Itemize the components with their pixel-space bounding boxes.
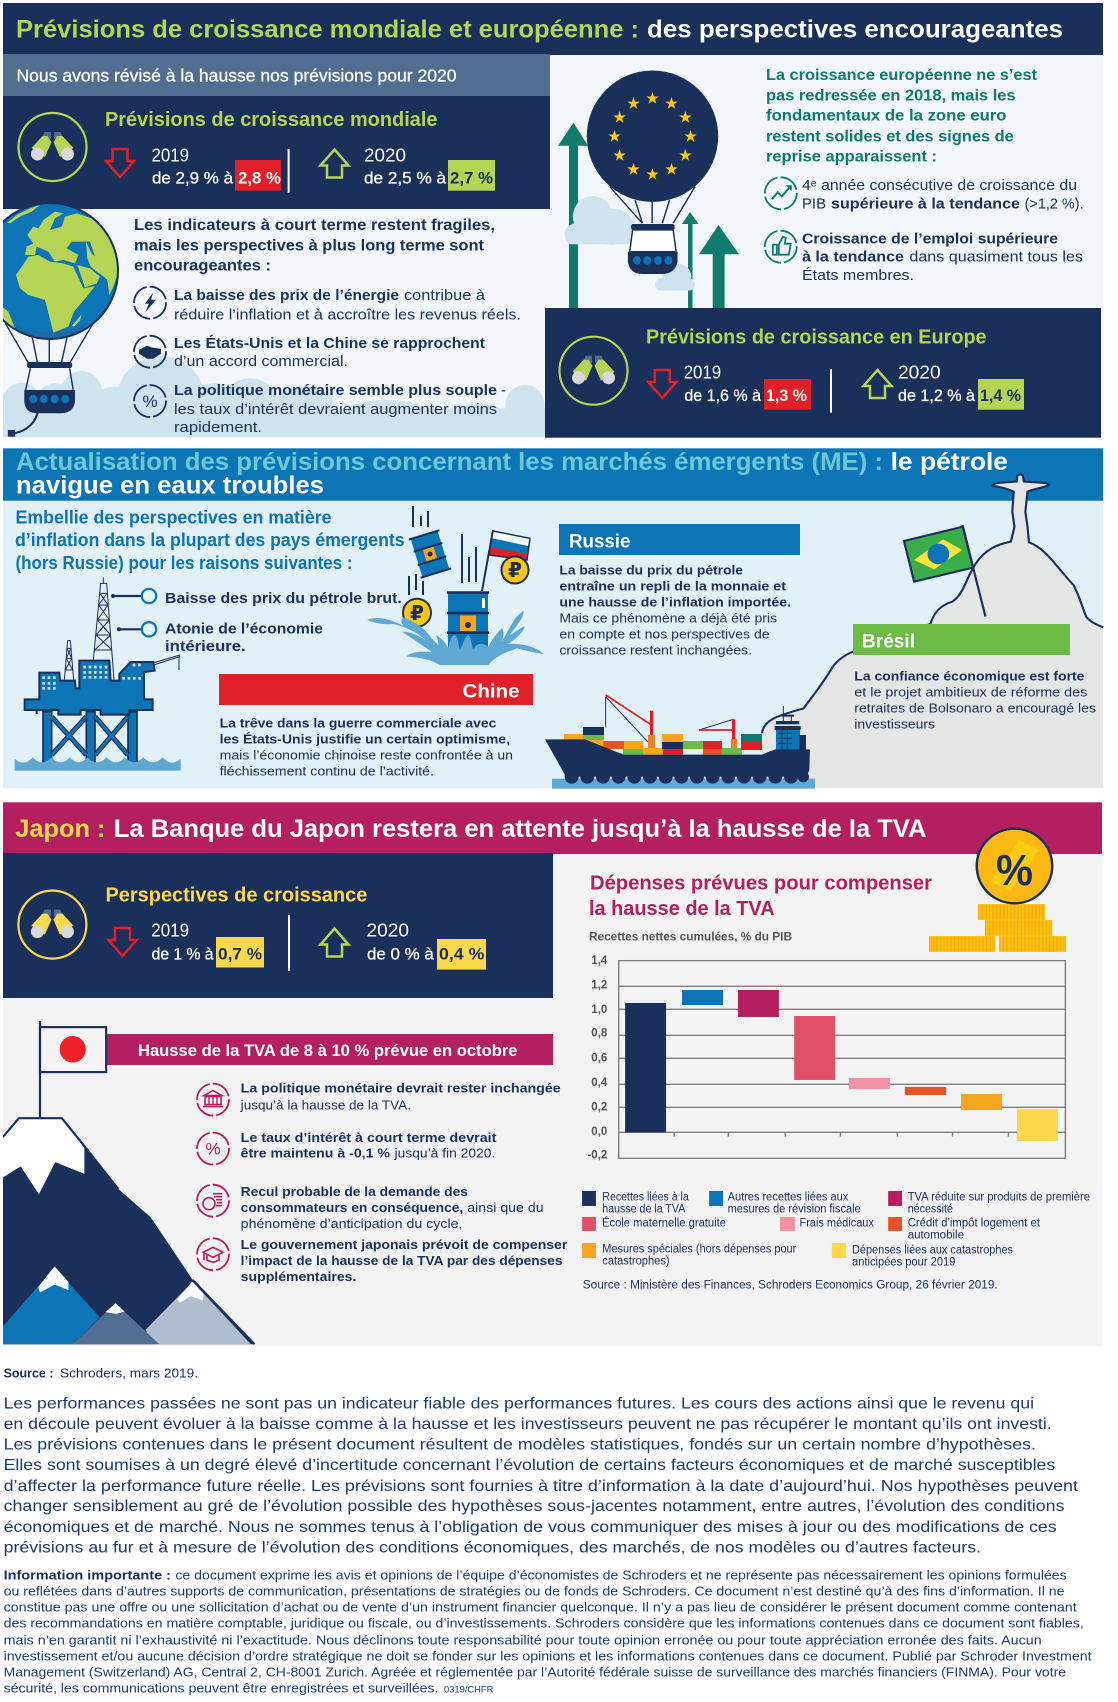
text: China: mais l’économie chinoise reste confrontée à un <box>220 748 513 763</box>
text: GDP growth: (>1,2 %). <box>1025 196 1084 212</box>
icon: gold coin with percent: % <box>996 846 1033 895</box>
falling lines <box>409 506 476 595</box>
text: Russia: une hausse de l’inflation importée. <box>559 594 791 609</box>
text: GDP growth: 4ᵉ année consécutive de croissance du <box>802 178 1077 194</box>
text: important information <box>4 1568 1092 1695</box>
heading: european growth: fondamentaux de la zone euro <box>766 108 1007 125</box>
text: important information: ou reflétées dans d’autres supports de communication, présentations de stratégies ou de fonds de Schroders. Ce document n’est destiné qu’à des fins d’information. Il ne <box>4 1584 1065 1598</box>
icon: percent <box>197 1133 229 1165</box>
icon: energy bolt <box>134 287 166 319</box>
legend: Dépenses liées aux catastrophes <box>852 1245 1013 1257</box>
text: consumer demand: consommateurs en conséquence, <box>241 1200 463 1215</box>
text: Brazil: La confiance économique est forte <box>854 668 1084 683</box>
text: short term indicators <box>134 217 495 275</box>
icon: down arrow <box>106 149 134 177</box>
icon: down arrow <box>648 370 676 398</box>
text: Brazil <box>854 668 1097 731</box>
text: energy prices: La baisse des prix de l’énergie <box>174 288 399 304</box>
banner: VAT increase: Hausse de la TVA de 8 à 10 % prévue en octobre <box>138 1042 518 1060</box>
chart subtitle: Recettes nettes cumulées, % du PIB <box>589 932 792 944</box>
legend: anticipées pour 2019 <box>852 1257 955 1269</box>
source line: Schroders, mars 2019. <box>60 1366 198 1380</box>
icon: coins <box>197 1185 229 1217</box>
text: Russia: Mais ce phénomène a déjà été pris <box>559 610 778 625</box>
icon: percent: % <box>205 1140 221 1159</box>
banner: VAT increase <box>106 1034 553 1065</box>
panel: Russia: Russie <box>569 532 630 553</box>
forecast 2019: 1,3 % <box>766 386 807 405</box>
legend: Autres recettes liées aux <box>728 1192 849 1204</box>
ruble coin left <box>403 599 431 627</box>
bullets: oil and domestic economy: Atonie de l’économie <box>165 620 323 637</box>
forecast 2020: 1,4 % <box>980 386 1021 405</box>
sea <box>15 757 181 771</box>
panel: China: Chine <box>462 681 520 702</box>
title: section 3 header <box>3 802 1102 854</box>
icon: binoculars <box>18 891 86 959</box>
text: monetary policy <box>174 383 506 436</box>
stars <box>608 92 697 180</box>
text: past performance disclaimer <box>4 1395 1079 1556</box>
icon: globe balloon <box>0 203 120 437</box>
hull <box>545 739 810 784</box>
text: important information: sécurité, les communications peuvent être enregistrées et surveillées. <box>4 1681 438 1695</box>
text: consumer demand: Recul probable de la demande des <box>241 1184 468 1199</box>
forecast 2019: de 1,6 % à <box>684 386 762 405</box>
forecast 2019: de 1 % à <box>152 944 214 963</box>
axis labels: 0,0 <box>591 1126 607 1138</box>
title: section 1 header: des perspectives encourageantes <box>647 16 1063 44</box>
panel: Russia <box>559 524 800 657</box>
icon: percent <box>134 385 166 417</box>
heading: Japan outlook: Perspectives de croissance <box>106 883 367 906</box>
text: consumer demand: ainsi que du <box>467 1200 544 1215</box>
forecast 2019 <box>152 145 281 191</box>
text: GDP growth: supérieure à la tendance <box>831 196 1020 212</box>
icon: cargo ship <box>545 695 815 789</box>
text: Russia <box>559 562 791 657</box>
text: employment growth: États membres. <box>802 267 914 284</box>
forecast 2020: 2,7 % <box>450 168 493 187</box>
text: energy prices <box>174 288 521 323</box>
bar: special measures <box>961 1094 1002 1110</box>
text: China: La trêve dans la guerre commerciale avec <box>220 716 496 731</box>
title: section 1 header: Prévisions de croissance mondiale et européenne : <box>16 16 639 44</box>
text: important information: constitue pas une offre ou une sollicitation d’achat ou de vente d’un instrument financier quelconque. Il n’y a pas lieu de considérer le présent document comme contenant <box>4 1601 1077 1615</box>
text: important information: Information importante : <box>4 1568 171 1582</box>
text: important information: Management (Switzerland) AG, Central 2, CH-8001 Zurich. Agréée et réglementée par l’Autorité fédérale suisse de surveillance des marchés financiers (FINMA). Pour votre <box>4 1665 1066 1679</box>
source line: Source : <box>4 1366 54 1380</box>
title: section 3 header: La Banque du Japon restera en attente jusqu’à la hausse de la TVA <box>114 815 927 843</box>
panel: Brazil <box>853 624 1097 731</box>
text: monetary policy Japan: La politique monétaire devrait rester inchangée <box>241 1080 561 1096</box>
bar: VAT receipts <box>625 1003 666 1132</box>
heading: european growth: reprise apparaissent : <box>766 149 937 166</box>
bar: reduced VAT <box>738 990 779 1017</box>
growth arrows <box>558 123 739 308</box>
text: government spending <box>241 1237 567 1284</box>
legend: Mesures spéciales (hors dépenses pour <box>602 1244 796 1256</box>
text: important information: des recommandations en matière comptable, juridique ou fiscale, ou d’investissements. Schroders considère que les informations contenues dans ce document sont fiables, <box>4 1617 1084 1631</box>
forecast 2020: de 0 % à <box>367 944 434 963</box>
axis labels: 0,8 <box>591 1028 608 1040</box>
text: employment growth: à la tendance <box>802 249 904 265</box>
panel: emerging markets background <box>3 500 1103 788</box>
text: past performance disclaimer: économiques et de marché. Nous ne sommes tenus à l’obligation de vous communiquer des mises à jour ou des modifications de ces <box>4 1519 1057 1536</box>
title: section 2 header: le pétrole <box>891 448 1008 476</box>
rig deck and blocks <box>25 661 155 715</box>
forecast 2019: de 2,9 % à <box>152 168 234 187</box>
icon: Brazil flag <box>904 525 985 617</box>
icon: up arrow <box>864 370 892 398</box>
icon: graduation cap <box>197 1238 229 1270</box>
axis labels: 0,4 <box>591 1077 608 1089</box>
text: short term rate: jusqu’à fin 2020. <box>393 1146 495 1160</box>
title: section 2 header <box>3 448 1103 501</box>
text: important information: 0319/CHFR <box>444 1684 494 1694</box>
panel: global and european forecasts <box>2 55 1103 438</box>
icon: binoculars <box>560 337 628 405</box>
icon: up arrow <box>320 928 348 956</box>
icon: percent: % <box>142 392 158 411</box>
legend <box>582 1191 1090 1269</box>
text: important information: mais n’en garantit ni l’exhaustivité ni l’exactitude. Nous déclinons toute responsabilité pour toute opinion erronée ou pour toute appréciation erronée des faits. Aucun <box>4 1633 1042 1647</box>
text: past performance disclaimer: Les performances passées ne sont pas un indicateur fiable des performances futures. Les cours des actions ainsi que le revenu qui <box>4 1395 1034 1412</box>
text: China: fléchissement continu de l’activité. <box>220 764 434 779</box>
splash <box>367 611 544 665</box>
panel: europe growth forecast <box>545 308 1101 438</box>
forecast 2020: 2020 <box>898 362 941 382</box>
forecast 2019: 2019 <box>152 145 189 165</box>
banner: revised forecasts: Nous avons révisé à la hausse nos prévisions pour 2020 <box>16 66 457 86</box>
text: government spending: Le gouvernement japonais prévoit de compenser <box>241 1237 567 1252</box>
basket <box>8 362 75 437</box>
forecast 2020: de 1,2 % à <box>898 386 976 405</box>
axis labels <box>587 955 608 1161</box>
falling barrel <box>409 530 451 578</box>
title: section 1 header <box>3 3 1103 55</box>
icon: down arrow <box>108 928 136 956</box>
forecast 2020: 2020 <box>366 920 409 940</box>
forecast 2019: 2,8 % <box>238 168 281 187</box>
axis labels: 1,0 <box>591 1004 607 1016</box>
chart source: Source : Ministère des Finances, Schroders Economics Group, 26 février 2019. <box>583 1280 998 1292</box>
title: section 3 header: Japon : <box>15 815 105 843</box>
text: past performance disclaimer: en découle peuvent évoluer à la baisse comme à la hausse et les investisseurs peuvent ne pas récupérer le montant qu’ils ont investi. <box>4 1416 1052 1433</box>
heading: european growth: La croissance européenne ne s’est <box>766 67 1038 84</box>
legend: hausse de la TVA <box>602 1204 686 1216</box>
text: past performance disclaimer: prévisions au fur et à mesure de l’évolution des conditions économiques, des marchés, de nos modèles ou d’autres facteurs. <box>4 1539 981 1556</box>
forecast 2019 <box>684 362 811 410</box>
text: monetary policy Japan <box>240 1080 561 1113</box>
heading: european growth: pas redressée en 2018, mais les <box>766 88 1016 105</box>
text: Brazil: investisseurs <box>854 716 936 731</box>
text: important information: ce document exprime les avis et opinions de l’équipe d’économistes de Schroders et ne représente pas nécessairement les opinions formulées <box>175 1568 1067 1582</box>
icon: up arrow <box>320 150 348 178</box>
text: Russia: La baisse du prix du pétrole <box>559 562 743 577</box>
text: Russia: croissance restent inchangées. <box>559 642 752 657</box>
text: past performance disclaimer: changer sensiblement au gré de l’évolution possible des hypothèses sous-jacentes notamment, entre autres, l’évolution des conditions <box>4 1498 1065 1515</box>
heading: world forecast: Prévisions de croissance mondiale <box>105 108 438 131</box>
icon: EU balloon <box>587 70 718 274</box>
text: energy prices: contribue à <box>404 288 486 304</box>
icon: thumbs up <box>765 231 797 263</box>
icon: bank <box>197 1084 229 1116</box>
text: trade deal: d’un accord commercial. <box>174 354 348 370</box>
forecast 2020 <box>898 362 1024 410</box>
bridge <box>775 706 806 751</box>
forecast 2020 <box>366 920 486 970</box>
legend: mesures de révision fiscale <box>728 1204 861 1216</box>
cranes <box>606 695 733 742</box>
icon: gold coin with percent <box>929 829 1066 952</box>
ruble coin right <box>502 556 528 584</box>
bar: housing and car tax credit <box>905 1087 946 1095</box>
heading: europe forecast: Prévisions de croissance en Europe <box>646 325 987 348</box>
forecast 2019: 0,7 % <box>218 944 262 963</box>
text: Brazil: retraites de Bolsonaro a encouragé les <box>854 700 1097 715</box>
chart: waterfall <box>587 955 1065 1161</box>
containers <box>564 727 762 755</box>
icon: oil rig <box>15 577 181 771</box>
bar: disaster spending <box>1017 1109 1058 1141</box>
text: employment growth <box>802 231 1083 284</box>
clouds behind the text <box>2 356 546 437</box>
balloon ropes <box>5 323 92 433</box>
text: past performance disclaimer: Les prévisions contenues dans le présent document résultent de modèles statistiques, fondés sur un certain nombre d’hypothèses. <box>4 1436 1036 1453</box>
illustration: Brazil mountain with statue <box>762 474 1103 788</box>
forecast 2020: 2020 <box>364 145 406 165</box>
illustration: mountains with Japanese flag <box>3 1021 255 1344</box>
windows <box>42 665 143 688</box>
bullets: oil and domestic economy: Baisse des prix du pétrole brut. <box>165 590 402 607</box>
source line <box>4 1366 198 1380</box>
text: consumer demand <box>241 1184 544 1231</box>
panel: world growth forecast <box>3 96 550 209</box>
bar: free preschool <box>794 1016 835 1080</box>
text: China <box>220 716 513 779</box>
text: monetary policy Japan: jusqu’à la hausse de la TVA. <box>240 1098 411 1113</box>
text: trade deal: Les États-Unis et la Chine se rapprochent <box>174 335 485 352</box>
heading: european growth: restent solides et des signes de <box>766 129 1014 146</box>
text: government spending: l’impact de la hausse de la TVA par des dépenses <box>241 1253 562 1268</box>
forecast 2019 <box>151 920 264 968</box>
forecast 2019: 2019 <box>151 920 189 940</box>
text: monetary policy: les taux d’intérêt devraient augmenter moins <box>174 402 497 418</box>
icon: oil barrels, ruble coins and splash <box>367 506 544 665</box>
text: short term indicators: mais les perspectives à plus long terme sont <box>134 238 485 255</box>
title: section 2 header: navigue en eaux troubles <box>16 471 324 499</box>
clouds around balloon <box>564 196 695 291</box>
text: short term indicators: Les indicateurs à court terme restent fragiles, <box>134 217 495 234</box>
text: trade deal <box>174 335 485 370</box>
text: consumer demand: phénomène d’anticipation du cycle, <box>241 1216 462 1231</box>
text: employment growth: Croissance de l’emploi supérieure <box>802 231 1058 247</box>
axis labels: 1,4 <box>591 955 608 967</box>
heading: inflation outlook <box>15 507 405 573</box>
heading: european growth <box>766 67 1038 166</box>
heading: inflation outlook: Embellie des perspectives en matière <box>16 507 332 527</box>
panel: China <box>219 674 533 779</box>
legend: Recettes liées à la <box>602 1192 689 1204</box>
text: short term rate: être maintenu à -0,1 % <box>241 1146 390 1160</box>
text: monetary policy: rapidement. <box>174 420 262 436</box>
bar: other receipts <box>682 990 723 1005</box>
bullets: oil and domestic economy: intérieure. <box>165 638 246 655</box>
text: GDP growth <box>802 178 1084 212</box>
bar: medical costs <box>849 1078 890 1089</box>
text: China: les États-Unis justifie un certain optimisme, <box>220 732 510 747</box>
text: government spending: supplémentaires. <box>241 1269 356 1284</box>
forecast 2020: 0,4 % <box>439 944 484 963</box>
forecast 2019: 2019 <box>684 362 721 382</box>
text: employment growth: dans quasiment tous les <box>909 249 1083 265</box>
Russian flag <box>482 530 530 591</box>
axis labels: -0,2 <box>587 1149 607 1161</box>
text: past performance disclaimer: Elles sont soumises à un degré élevé d’incertitude concernant l’évolution de certains facteurs économiques et de marché susceptibles <box>4 1457 1055 1474</box>
derricks <box>64 577 180 680</box>
panel: Japan growth outlook <box>3 853 553 998</box>
title: section 2 header: Actualisation des prévisions concernant les marchés émergents (ME) : <box>16 448 883 476</box>
ruble coin right: ₽ <box>508 558 522 582</box>
text: monetary policy: La politique monétaire semble plus souple <box>174 383 497 399</box>
text: short term indicators: encourageantes : <box>134 258 271 275</box>
text: Brazil: et le projet ambitieux de réforme des <box>854 684 1088 699</box>
text: important information: investissement et/ou aucune décision d’ordre stratégique ne doit se fonder sur les opinions et les informations contenues dans ce document. Publié par Schroder Investment <box>4 1649 1092 1663</box>
axis labels: 0,6 <box>591 1053 607 1065</box>
banner: revised forecasts <box>3 54 550 96</box>
heading: planned spending: la hausse de la TVA <box>589 897 775 920</box>
forecast 2020: de 2,5 % à <box>364 168 447 187</box>
text: short term rate <box>241 1130 497 1160</box>
text: Russia: en compte et nos perspectives de <box>559 626 770 641</box>
main barrel <box>447 592 489 652</box>
panel: Japan background <box>3 853 1102 1346</box>
axis labels: 1,2 <box>591 980 607 992</box>
forecast 2020 <box>364 145 495 191</box>
legend: catastrophes) <box>602 1256 670 1268</box>
heading: inflation outlook: d’inflation dans la plupart des pays émergents <box>15 530 405 550</box>
icon: handshake <box>134 336 166 368</box>
text: GDP growth: PIB <box>802 196 826 212</box>
text: short term rate: Le taux d’intérêt à court terme devrait <box>241 1130 497 1145</box>
legend: Frais médicaux <box>800 1218 874 1230</box>
legend: nécessité <box>908 1204 953 1216</box>
legend: automobile <box>908 1230 964 1242</box>
icon: binoculars <box>18 113 86 181</box>
bullets: oil and domestic economy <box>111 589 402 655</box>
ruble coin left: ₽ <box>410 601 424 625</box>
rig legs <box>43 712 137 763</box>
text: Russia: entraîne un repli de la monnaie et <box>559 578 787 593</box>
axis labels: 0,2 <box>591 1102 607 1114</box>
legend: Crédit d’impôt logement et <box>908 1218 1041 1230</box>
text: energy prices: réduire l’inflation et à accroître les revenus réels. <box>174 307 521 323</box>
legend: TVA réduite sur produits de première <box>908 1192 1090 1204</box>
heading: inflation outlook: (hors Russie) pour les raisons suivantes : <box>16 553 352 573</box>
heading: planned spending: Dépenses prévues pour compenser <box>590 871 932 894</box>
text: past performance disclaimer: d’affecter la performance future réelle. Les prévisions sont fournies à titre d’information à la date d’aujourd’hui. Nos hypothèses peuvent <box>4 1478 1079 1495</box>
panel: Brazil: Brésil <box>862 631 915 652</box>
legend: École maternelle gratuite <box>602 1217 726 1230</box>
text: monetary policy: - <box>501 383 506 399</box>
heading: planned spending <box>589 871 932 920</box>
icon: chart up <box>765 177 797 209</box>
